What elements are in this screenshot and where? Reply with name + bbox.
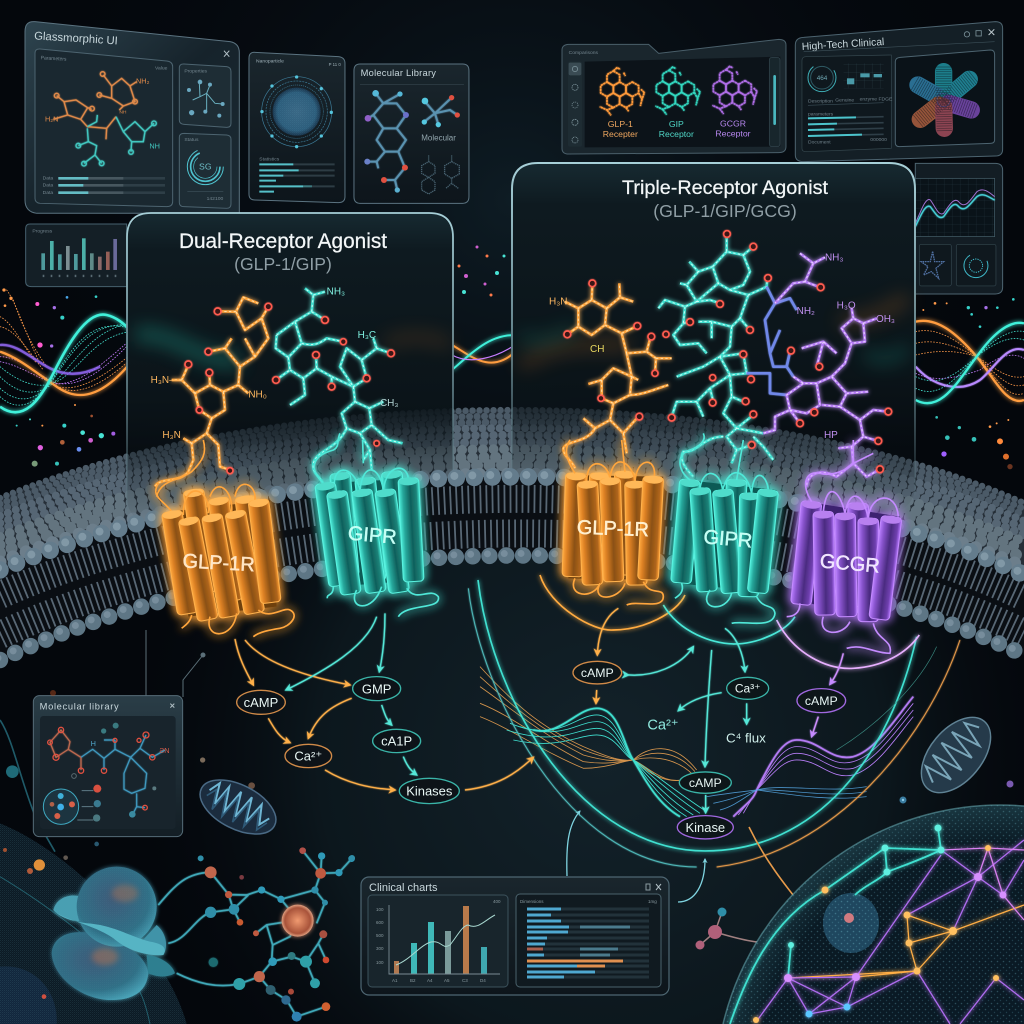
heading: Dual-Receptor Agonist: Dual-Receptor Agonist bbox=[179, 230, 387, 253]
panel: Molecular library bbox=[33, 696, 183, 837]
node: Kinases bbox=[399, 778, 459, 804]
node: cAMP purple bbox=[797, 689, 846, 713]
lipid bilayer: tails and front head rows bbox=[0, 475, 1024, 660]
combo chart: 300 bbox=[376, 946, 384, 951]
panel: Glassmorphic UI dashboards: SG bbox=[199, 162, 212, 172]
lipid membrane surface bbox=[0, 410, 1024, 590]
panel: Glassmorphic UI dashboards: Status bbox=[184, 137, 199, 143]
pathway: dual receptor signalling bbox=[235, 613, 533, 804]
signalling arcs bbox=[468, 575, 960, 867]
molecule: dual agonist: H₃C bbox=[358, 330, 376, 341]
panel: receptors overview: Genuine bbox=[835, 97, 854, 103]
progress bars bbox=[43, 175, 165, 196]
node: Ca2+: Ca²⁺ bbox=[294, 748, 322, 763]
receptor: GLP-1R bbox=[562, 440, 664, 605]
node: Kinase: Kinase bbox=[685, 820, 725, 835]
receptor labels: Recepter bbox=[603, 129, 638, 139]
molecule: dual agonist: NH₀ bbox=[248, 389, 267, 400]
molecule in glass panel bbox=[53, 72, 156, 166]
network edges bbox=[730, 828, 1024, 1024]
receptor: GIPR bbox=[671, 433, 779, 623]
arrows bbox=[596, 608, 843, 813]
molecule: dual agonist bbox=[151, 287, 403, 487]
molecule: triple agonist bbox=[549, 231, 895, 487]
molecule: GCGR receptor bbox=[712, 66, 757, 114]
node: cAMP orange bbox=[573, 661, 622, 684]
glass panel: Triple-Receptor Agonist bbox=[512, 163, 915, 513]
subheading: GLP-1/GIP: (GLP-1/GIP) bbox=[234, 254, 332, 274]
panel: Glassmorphic UI dashboards: 142100 bbox=[207, 196, 224, 202]
panel: Glassmorphic UI dashboards: H₂N bbox=[45, 115, 58, 124]
combo chart: 600 bbox=[376, 920, 384, 925]
clinical bars: Document bbox=[808, 139, 831, 145]
node: cAMP bbox=[237, 690, 285, 714]
receptors: triple panel bbox=[562, 433, 902, 653]
left wave with particles bbox=[0, 288, 130, 467]
panel title: Glassmorphic UI: Glassmorphic UI bbox=[34, 30, 118, 47]
label: GIPR: GIPR bbox=[703, 526, 753, 552]
panel: Glassmorphic UI dashboards bbox=[25, 22, 469, 287]
molecule: triple agonist: CH bbox=[590, 344, 604, 355]
glowing organelle bbox=[52, 867, 175, 1000]
receptor labels: GCGR bbox=[720, 119, 746, 129]
progress bars: Data bbox=[43, 190, 53, 196]
network nodes bbox=[753, 824, 1006, 1023]
molecule: dual agonist: H₃N bbox=[162, 430, 181, 441]
receptor: GIPR bbox=[314, 433, 439, 617]
label: Ca2+: Ca²⁺ bbox=[647, 717, 679, 733]
receptor labels: Receptor bbox=[715, 129, 751, 139]
six-lobed receptor complex bbox=[914, 67, 975, 133]
panel: receptors overview: 464 bbox=[817, 75, 828, 82]
molecule: triple agonist: NH₃ bbox=[825, 253, 843, 264]
bar chart bbox=[41, 238, 117, 276]
node: cAIP: cA1P bbox=[381, 734, 412, 749]
panel: Glassmorphic UI dashboards: P 11 0 bbox=[329, 62, 341, 67]
signal waves inside the triple pathway bbox=[480, 667, 913, 817]
network cell, bottom right bbox=[723, 805, 1024, 1024]
connector lines bbox=[146, 630, 801, 905]
receptor labels: GLP-1 bbox=[608, 119, 633, 129]
bars: Statistics bbox=[259, 157, 280, 163]
molecule: triple agonist: H₃N bbox=[549, 297, 567, 308]
panel title: Molecular Library: Molecular Library bbox=[361, 68, 436, 78]
gauge ring bbox=[187, 149, 223, 185]
combo chart: 100 bbox=[376, 907, 384, 912]
receptor labels bbox=[603, 119, 751, 139]
title: Molecular library bbox=[40, 702, 119, 712]
node: Ca3+ bbox=[727, 677, 769, 699]
panel: receptors overview: Description bbox=[808, 99, 833, 105]
node: cAMP teal: cAMP bbox=[689, 776, 722, 790]
clinical bars: 000000 bbox=[870, 137, 887, 143]
bars bbox=[259, 157, 335, 192]
gauge bbox=[808, 64, 836, 92]
horizontal bars chart: 1mg bbox=[648, 899, 657, 904]
combo chart: A1 bbox=[392, 978, 398, 983]
node: cAMP: cAMP bbox=[244, 695, 278, 710]
right wave with particles bbox=[916, 298, 1024, 469]
panel: Glassmorphic UI dashboards: Value bbox=[155, 65, 168, 71]
small cell lower left bbox=[0, 966, 57, 1024]
horizontal bars chart: Dimensions bbox=[520, 899, 544, 904]
combo chart: B2 bbox=[410, 978, 416, 983]
cell with dotted membrane, bottom left bbox=[0, 720, 355, 1024]
panel: Glassmorphic UI dashboards: NH bbox=[149, 141, 160, 150]
particles lower centre bbox=[50, 690, 1014, 861]
molecule: triple agonist: NH₂ bbox=[797, 306, 815, 317]
receptor: GCGR bbox=[787, 440, 902, 653]
combo chart: A4 bbox=[427, 978, 433, 983]
molecule: triple agonist: HP bbox=[824, 430, 838, 441]
node: Kinase bbox=[677, 816, 733, 839]
inner nucleus bbox=[823, 893, 879, 953]
title: Clinical charts bbox=[369, 882, 438, 894]
combo chart: 500 bbox=[376, 933, 384, 938]
heading: Triple-Receptor Agonist: Triple-Receptor Agonist bbox=[622, 177, 828, 199]
molecule: GLP-1 receptor bbox=[600, 68, 644, 115]
panel: Glassmorphic UI dashboards: Properties bbox=[184, 69, 208, 75]
small molecule near cell bbox=[696, 908, 782, 950]
node: GMP bbox=[353, 677, 401, 701]
nanoparticle sphere bbox=[260, 75, 333, 148]
node: GMP: GMP bbox=[362, 681, 391, 696]
molecule: dual agonist: CH₃ bbox=[380, 398, 398, 409]
label: GLP-1R: GLP-1R bbox=[576, 517, 649, 541]
combo chart: D4 bbox=[480, 978, 486, 983]
atom legend bbox=[43, 785, 101, 824]
pathway: triple receptor signalling bbox=[573, 608, 846, 839]
panel: Glassmorphic UI dashboards: NH₂ bbox=[136, 76, 150, 85]
combo chart: 400 bbox=[493, 899, 501, 904]
panel title: High-Tech Clinical: High-Tech Clinical bbox=[801, 37, 885, 53]
molecule with organelle bbox=[158, 851, 352, 1017]
node: cAIP bbox=[373, 729, 421, 753]
panel: Clinical charts bbox=[361, 877, 669, 995]
panel: Glassmorphic UI dashboards: Molecular bbox=[421, 134, 456, 143]
label: GIPR: GIPR bbox=[347, 523, 397, 549]
molecules library bbox=[367, 93, 457, 190]
panel: Glassmorphic UI dashboards: Parameters bbox=[41, 55, 67, 63]
node: Ca2+ bbox=[285, 744, 332, 768]
mitochondrion left bbox=[191, 769, 285, 845]
panel: Glassmorphic UI dashboards: Progress bbox=[32, 228, 53, 234]
progress bars: Data bbox=[43, 175, 53, 181]
node: Kinases: Kinases bbox=[406, 784, 453, 799]
node: cAMP teal bbox=[679, 772, 731, 793]
label: C flux: C⁴ flux bbox=[726, 731, 766, 746]
panel: receptors overview: Comparisons bbox=[569, 50, 599, 56]
node: cAMP purple: cAMP bbox=[805, 694, 838, 708]
molecule diagram bbox=[50, 730, 165, 814]
combo chart: A5 bbox=[444, 978, 450, 983]
receptors: dual panel bbox=[156, 433, 439, 637]
panel: Glassmorphic UI dashboards: NH bbox=[119, 109, 127, 115]
panel: Molecular library: H bbox=[91, 739, 96, 748]
horizontal bars chart bbox=[520, 899, 657, 977]
panel: receptors overview: enzyme FDGE bbox=[860, 96, 893, 102]
combo chart: 100 bbox=[376, 960, 384, 965]
label: GCGR: GCGR bbox=[819, 550, 881, 578]
receptor labels: Receptor bbox=[659, 129, 694, 139]
node: Ca3+: Ca³⁺ bbox=[735, 682, 760, 696]
clinical bars: parameters bbox=[808, 111, 834, 117]
panel: receptors overview bbox=[562, 22, 1003, 294]
clinical bars bbox=[808, 111, 887, 145]
subheading: GLP-1/GIP/GCG: (GLP-1/GIP/GCG) bbox=[653, 201, 797, 221]
molecule: dual agonist: H₃N— bbox=[151, 375, 179, 386]
progress bars: Data bbox=[43, 183, 53, 189]
label: GLP-1R: GLP-1R bbox=[182, 550, 255, 576]
molecule: triple agonist: OH₃ bbox=[876, 314, 895, 325]
node: cAMP orange: cAMP bbox=[581, 666, 614, 680]
panel: Molecular library: ƧN bbox=[159, 746, 170, 755]
line chart panel bbox=[915, 178, 996, 286]
panel: Glassmorphic UI dashboards: Nanoparticle bbox=[256, 58, 284, 64]
molecule: triple agonist: H₃O bbox=[837, 300, 856, 311]
molecule: dual agonist: NH₃ bbox=[327, 287, 345, 298]
arrows bbox=[235, 613, 533, 790]
receptor: GLP-1R bbox=[156, 440, 294, 637]
glass panel: Dual-Receptor Agonist bbox=[127, 213, 453, 523]
combo chart: C3 bbox=[462, 978, 468, 983]
combo chart bbox=[376, 899, 501, 983]
middle wave and particles between panels bbox=[452, 246, 515, 370]
molecule: GIP receptor bbox=[655, 67, 700, 115]
mitochondrion right bbox=[908, 705, 1004, 805]
receptor labels: GIP bbox=[669, 119, 684, 129]
